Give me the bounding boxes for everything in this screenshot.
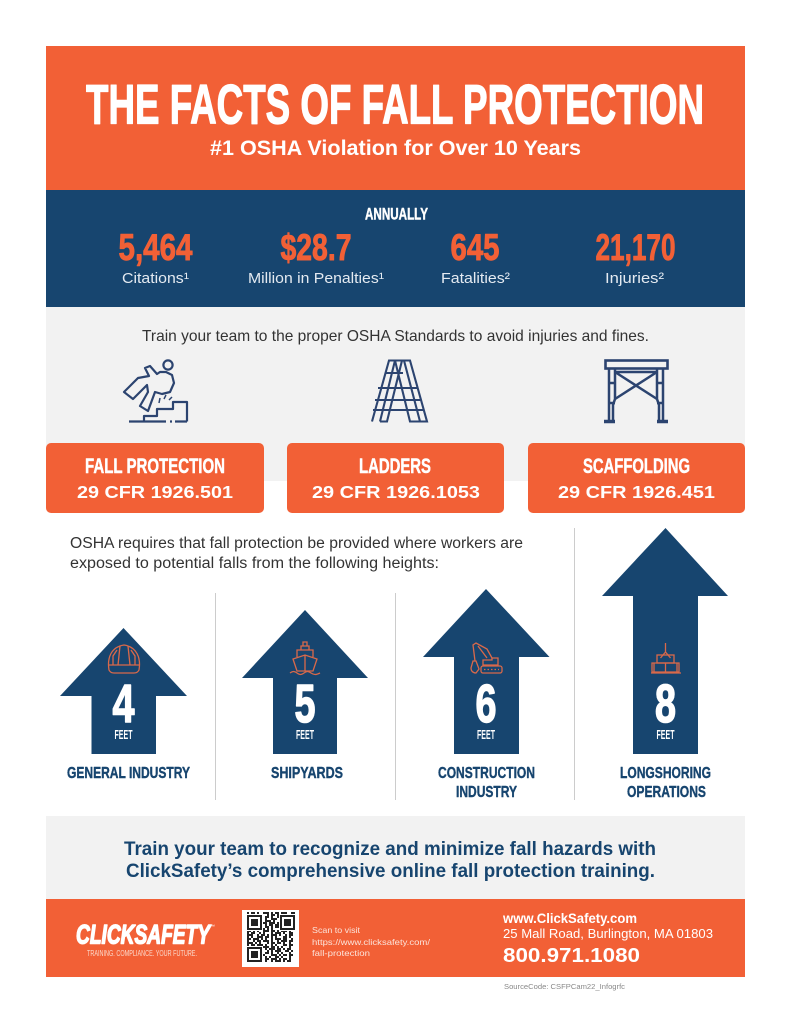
arrow: construction industry 6 feet: FEET: [477, 727, 495, 742]
contact details: 25 Mall Road, Burlington, MA 01803: [503, 926, 713, 941]
scan text: fall-protection: [312, 948, 370, 958]
standards intro text: Train your team to the proper OSHA Standards to avoid injuries and fines.: [142, 328, 649, 345]
icon: crane load: [651, 643, 681, 673]
stat: fatalities: [441, 227, 510, 287]
label: longshoring operations: LONGSHORING: [620, 765, 711, 782]
icon: scaffolding: [604, 360, 668, 422]
button: fall protection: [46, 443, 264, 513]
arrow: general industry 4 feet: FEET: [114, 727, 133, 742]
contact details: www.ClickSafety.com: [502, 911, 637, 926]
icon: hard hat: [109, 645, 139, 673]
label: longshoring operations: OPERATIONS: [627, 784, 706, 801]
panel: footer: [46, 899, 745, 977]
contact details: [502, 911, 713, 967]
button: ladders: [287, 443, 504, 513]
panel: annual statistics: [46, 190, 745, 307]
arrow: longshoring operations 8 feet: FEET: [656, 727, 675, 742]
panel: call to action: [46, 816, 745, 899]
label: construction industry: INDUSTRY: [456, 784, 517, 801]
arrow: shipyards 5 feet: FEET: [296, 727, 314, 742]
scan text: https://www.clicksafety.com/: [312, 937, 431, 947]
label: shipyards: SHIPYARDS: [271, 765, 343, 782]
header panel: [46, 46, 745, 190]
panel: call to action: Train your team to recognize and minimize fall hazards with: [124, 839, 656, 860]
stat: citations: Citations¹: [122, 270, 189, 287]
stat: injuries: Injuries²: [605, 270, 664, 287]
label: longshoring operations: [620, 765, 711, 801]
arrow: construction industry 6 feet: 6: [476, 674, 496, 734]
arrow: general industry 4 feet: 4: [112, 674, 134, 734]
arrow: shipyards 5 feet: [242, 610, 368, 754]
label: construction industry: [438, 765, 535, 801]
icon: excavator: [471, 643, 502, 673]
source code note: SourceCode: CSFPCam22_Infogrfc: [504, 982, 625, 991]
panel: standards background: [46, 307, 745, 481]
stat: penalties: Million in Penalties¹: [248, 270, 384, 287]
stat: injuries: [596, 227, 676, 287]
logo: TRAINING. COMPLIANCE. YOUR FUTURE.: [87, 949, 197, 958]
button: fall protection: FALL PROTECTION: [85, 455, 225, 478]
heights intro text: exposed to potential falls from the following heights:: [70, 555, 439, 572]
heights intro text: OSHA requires that fall protection be provided where workers are: [70, 535, 523, 552]
stat: citations: [118, 227, 193, 287]
arrow: longshoring operations 8 feet: [602, 528, 728, 754]
arrow: construction industry 6 feet: [423, 589, 550, 754]
logo: CLICKSAFETY: [76, 920, 212, 950]
label: general industry: GENERAL INDUSTRY: [67, 765, 190, 782]
button: ladders: LADDERS: [359, 455, 431, 478]
icon: person falling on stairs: [124, 360, 187, 422]
icon: ship: [290, 642, 320, 674]
stat: penalties: [248, 227, 384, 287]
button: scaffolding: [528, 443, 745, 513]
contact details: 800.971.1080: [503, 945, 640, 967]
stat: fatalities: 645: [450, 227, 500, 268]
stat: penalties: $28.7: [280, 227, 352, 268]
logo: [76, 920, 215, 958]
button: scaffolding: SCAFFOLDING: [583, 455, 690, 478]
arrow: longshoring operations 8 feet: 8: [655, 674, 676, 734]
annually heading: ANNUALLY: [365, 204, 428, 224]
logo: ™: [210, 924, 215, 930]
scan text: Scan to visit: [312, 925, 361, 935]
arrow: shipyards 5 feet: 5: [294, 674, 316, 734]
stat: injuries: 21,170: [596, 227, 676, 268]
panel: call to action: ClickSafety’s comprehensive online fall protection training.: [126, 861, 655, 882]
button: ladders: 29 CFR 1926.1053: [312, 482, 480, 502]
stat: fatalities: Fatalities²: [441, 270, 510, 287]
QR code: [242, 910, 299, 967]
scan text: [312, 925, 431, 958]
label: construction industry: CONSTRUCTION: [438, 765, 535, 782]
icon: ladder: [372, 360, 427, 422]
stat: citations: 5,464: [118, 227, 193, 268]
arrow: general industry 4 feet: [60, 628, 187, 754]
button: fall protection: 29 CFR 1926.501: [77, 482, 233, 502]
heights intro text: [70, 535, 523, 572]
button: scaffolding: 29 CFR 1926.451: [558, 482, 715, 502]
subtitle: #1 OSHA Violation for Over 10 Years: [210, 137, 581, 160]
